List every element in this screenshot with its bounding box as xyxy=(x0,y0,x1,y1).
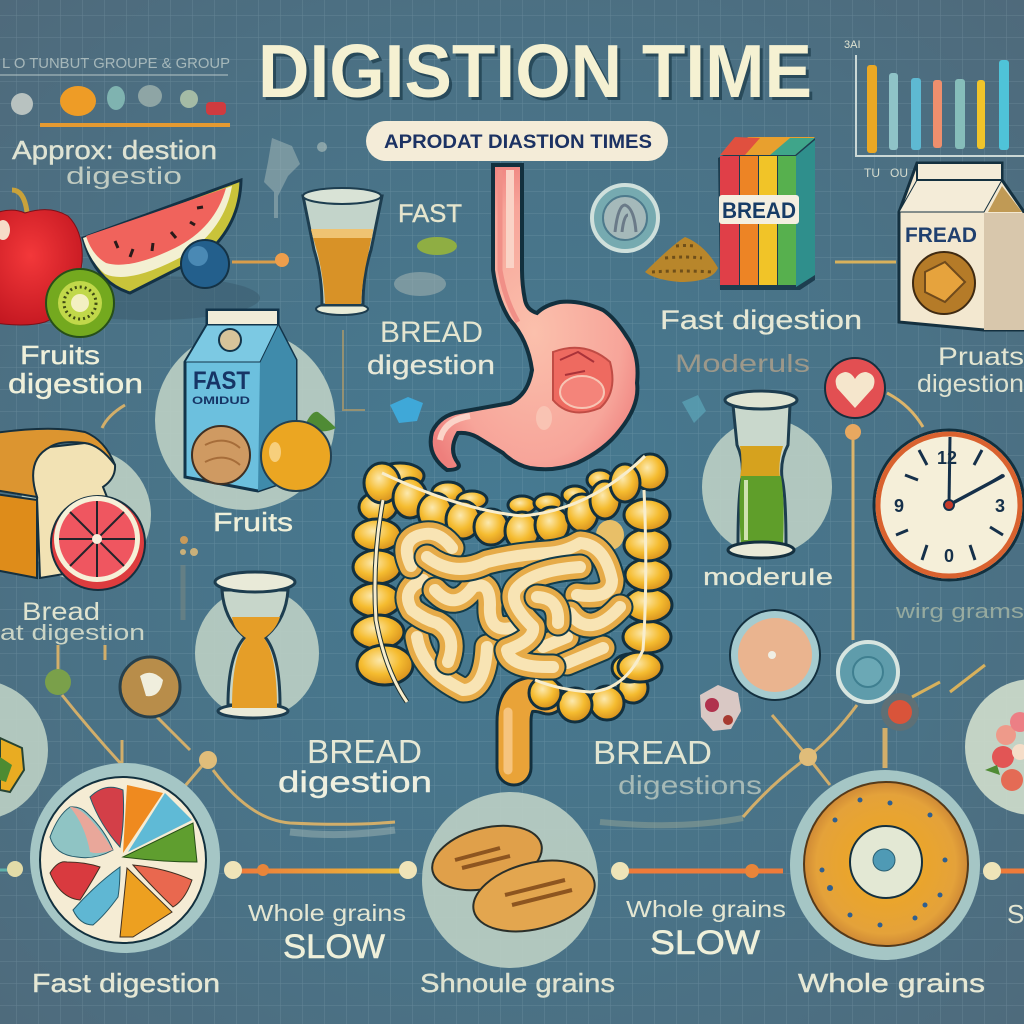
bottom captions: Shnoule grains xyxy=(420,968,615,998)
bread digestion label: digestion xyxy=(367,350,495,380)
bread digestion label: BREAD xyxy=(380,316,483,349)
icon: clock: 3 xyxy=(995,496,1005,516)
icon: hourglass right xyxy=(702,391,832,558)
legend caption: Approx: destion xyxy=(12,135,217,165)
bread label: Bread xyxy=(22,598,100,626)
top-left legend: L O TUNBUT GROUPE & GROUP xyxy=(2,55,230,72)
icon: bagel xyxy=(790,770,980,960)
icon: milk carton right: FREAD xyxy=(905,224,977,247)
faded label right: wirg grams xyxy=(895,601,1024,623)
fruits label left: digestion xyxy=(8,368,143,399)
bottom captions xyxy=(32,968,985,998)
whole grains slow left: Whole grains xyxy=(248,900,406,926)
icon: milk carton left xyxy=(155,310,336,510)
icon: bread and grapefruit xyxy=(0,429,151,590)
small faded icons xyxy=(343,330,706,423)
legend caption: digestio xyxy=(66,163,182,190)
connector dots bottom-left xyxy=(45,405,395,835)
icon: milk carton left: FAST xyxy=(193,367,250,395)
bread label xyxy=(0,598,145,645)
bread digestion label centre-left: digestion xyxy=(278,766,432,799)
bread digestion label xyxy=(367,316,495,380)
icon: red marker xyxy=(881,665,985,731)
fast digestion label right: Fast digestion xyxy=(660,305,862,335)
bottom captions: Whole grains xyxy=(798,968,985,998)
fast label: FAST xyxy=(398,200,462,228)
timeline left xyxy=(0,861,417,879)
bread label: at digestion xyxy=(0,620,145,645)
bread digestion label centre-right xyxy=(593,734,762,800)
icon: milk carton left: OMIDUD xyxy=(192,395,250,407)
whole grains slow right: Whole grains xyxy=(626,896,786,922)
bread digestion label centre-left xyxy=(278,733,432,799)
icon: stomach xyxy=(431,165,638,470)
connector lines bottom right xyxy=(600,705,885,825)
moderule label: moderuIe xyxy=(703,564,833,591)
fast label xyxy=(394,200,462,296)
icon: clock: 12 xyxy=(937,448,957,468)
pruats label: Pruats xyxy=(938,343,1024,371)
connector to carton xyxy=(835,260,896,264)
icon: bread rolls xyxy=(422,792,602,968)
icon: intestines xyxy=(351,454,672,770)
icon: glass of juice xyxy=(303,188,382,315)
fast digestion label right xyxy=(660,305,862,378)
bread digestion label centre-right: BREAD xyxy=(593,734,712,771)
icon: clock xyxy=(874,430,1024,580)
top-left legend xyxy=(0,55,230,125)
whole grains slow left xyxy=(248,900,406,966)
icon: sparse disc xyxy=(592,185,658,251)
icon: rainbow book box xyxy=(718,137,815,290)
icon: clock: 9 xyxy=(894,496,904,516)
bar chart xyxy=(844,39,1024,180)
icon: rainbow book box: BREAD xyxy=(722,198,796,223)
faded specks xyxy=(180,536,198,620)
whole grains slow right xyxy=(626,896,786,962)
bread digestion label centre-right: digestions xyxy=(618,770,762,800)
icon: grain pile xyxy=(645,237,718,282)
legend caption xyxy=(12,135,217,190)
fruits label left xyxy=(8,340,143,399)
fast digestion label right: Moderuls xyxy=(675,350,810,378)
icon: small food cluster xyxy=(700,685,741,731)
timeline right xyxy=(611,862,1024,880)
icon: hourglass left xyxy=(195,572,319,718)
colon band lines xyxy=(375,456,646,702)
bread digestion label centre-left: BREAD xyxy=(307,733,422,770)
fruits label left: Fruits xyxy=(20,340,100,370)
large intestine beads xyxy=(351,454,672,770)
faded sketch icon xyxy=(264,138,327,218)
bar chart: TU xyxy=(864,166,880,180)
icon: fruits xyxy=(0,180,260,337)
small intestine coils xyxy=(407,534,620,690)
whole grains slow right: SLOW xyxy=(650,924,760,962)
partial letter right edge: S xyxy=(1007,899,1024,929)
icon: milk carton right xyxy=(899,163,1024,330)
connector: fruit to glass xyxy=(232,253,289,267)
whole grains slow left: SLOW xyxy=(283,928,385,966)
title: DIGISTION TIME xyxy=(258,29,812,113)
bar chart: OU xyxy=(890,166,908,180)
pruats label xyxy=(917,343,1024,398)
icon: fruit plate xyxy=(30,763,220,953)
icon: clock: 0 xyxy=(944,546,954,566)
partial food circle left edge xyxy=(0,680,48,820)
partial flower circle right edge xyxy=(965,679,1024,815)
fruits label centre: Fruits xyxy=(213,507,293,537)
title: DIGISTION TIME xyxy=(261,32,815,116)
bar chart: 3AI xyxy=(844,39,861,51)
icon: small disc xyxy=(838,642,898,702)
subtitle pill xyxy=(366,121,668,161)
bottom captions: Fast digestion xyxy=(32,968,220,998)
icon: dish xyxy=(730,610,820,700)
subtitle pill: APRODAT DIASTION TIMES xyxy=(384,132,652,153)
icon: heart badge xyxy=(825,358,923,640)
pruats label: digestion xyxy=(917,370,1024,398)
